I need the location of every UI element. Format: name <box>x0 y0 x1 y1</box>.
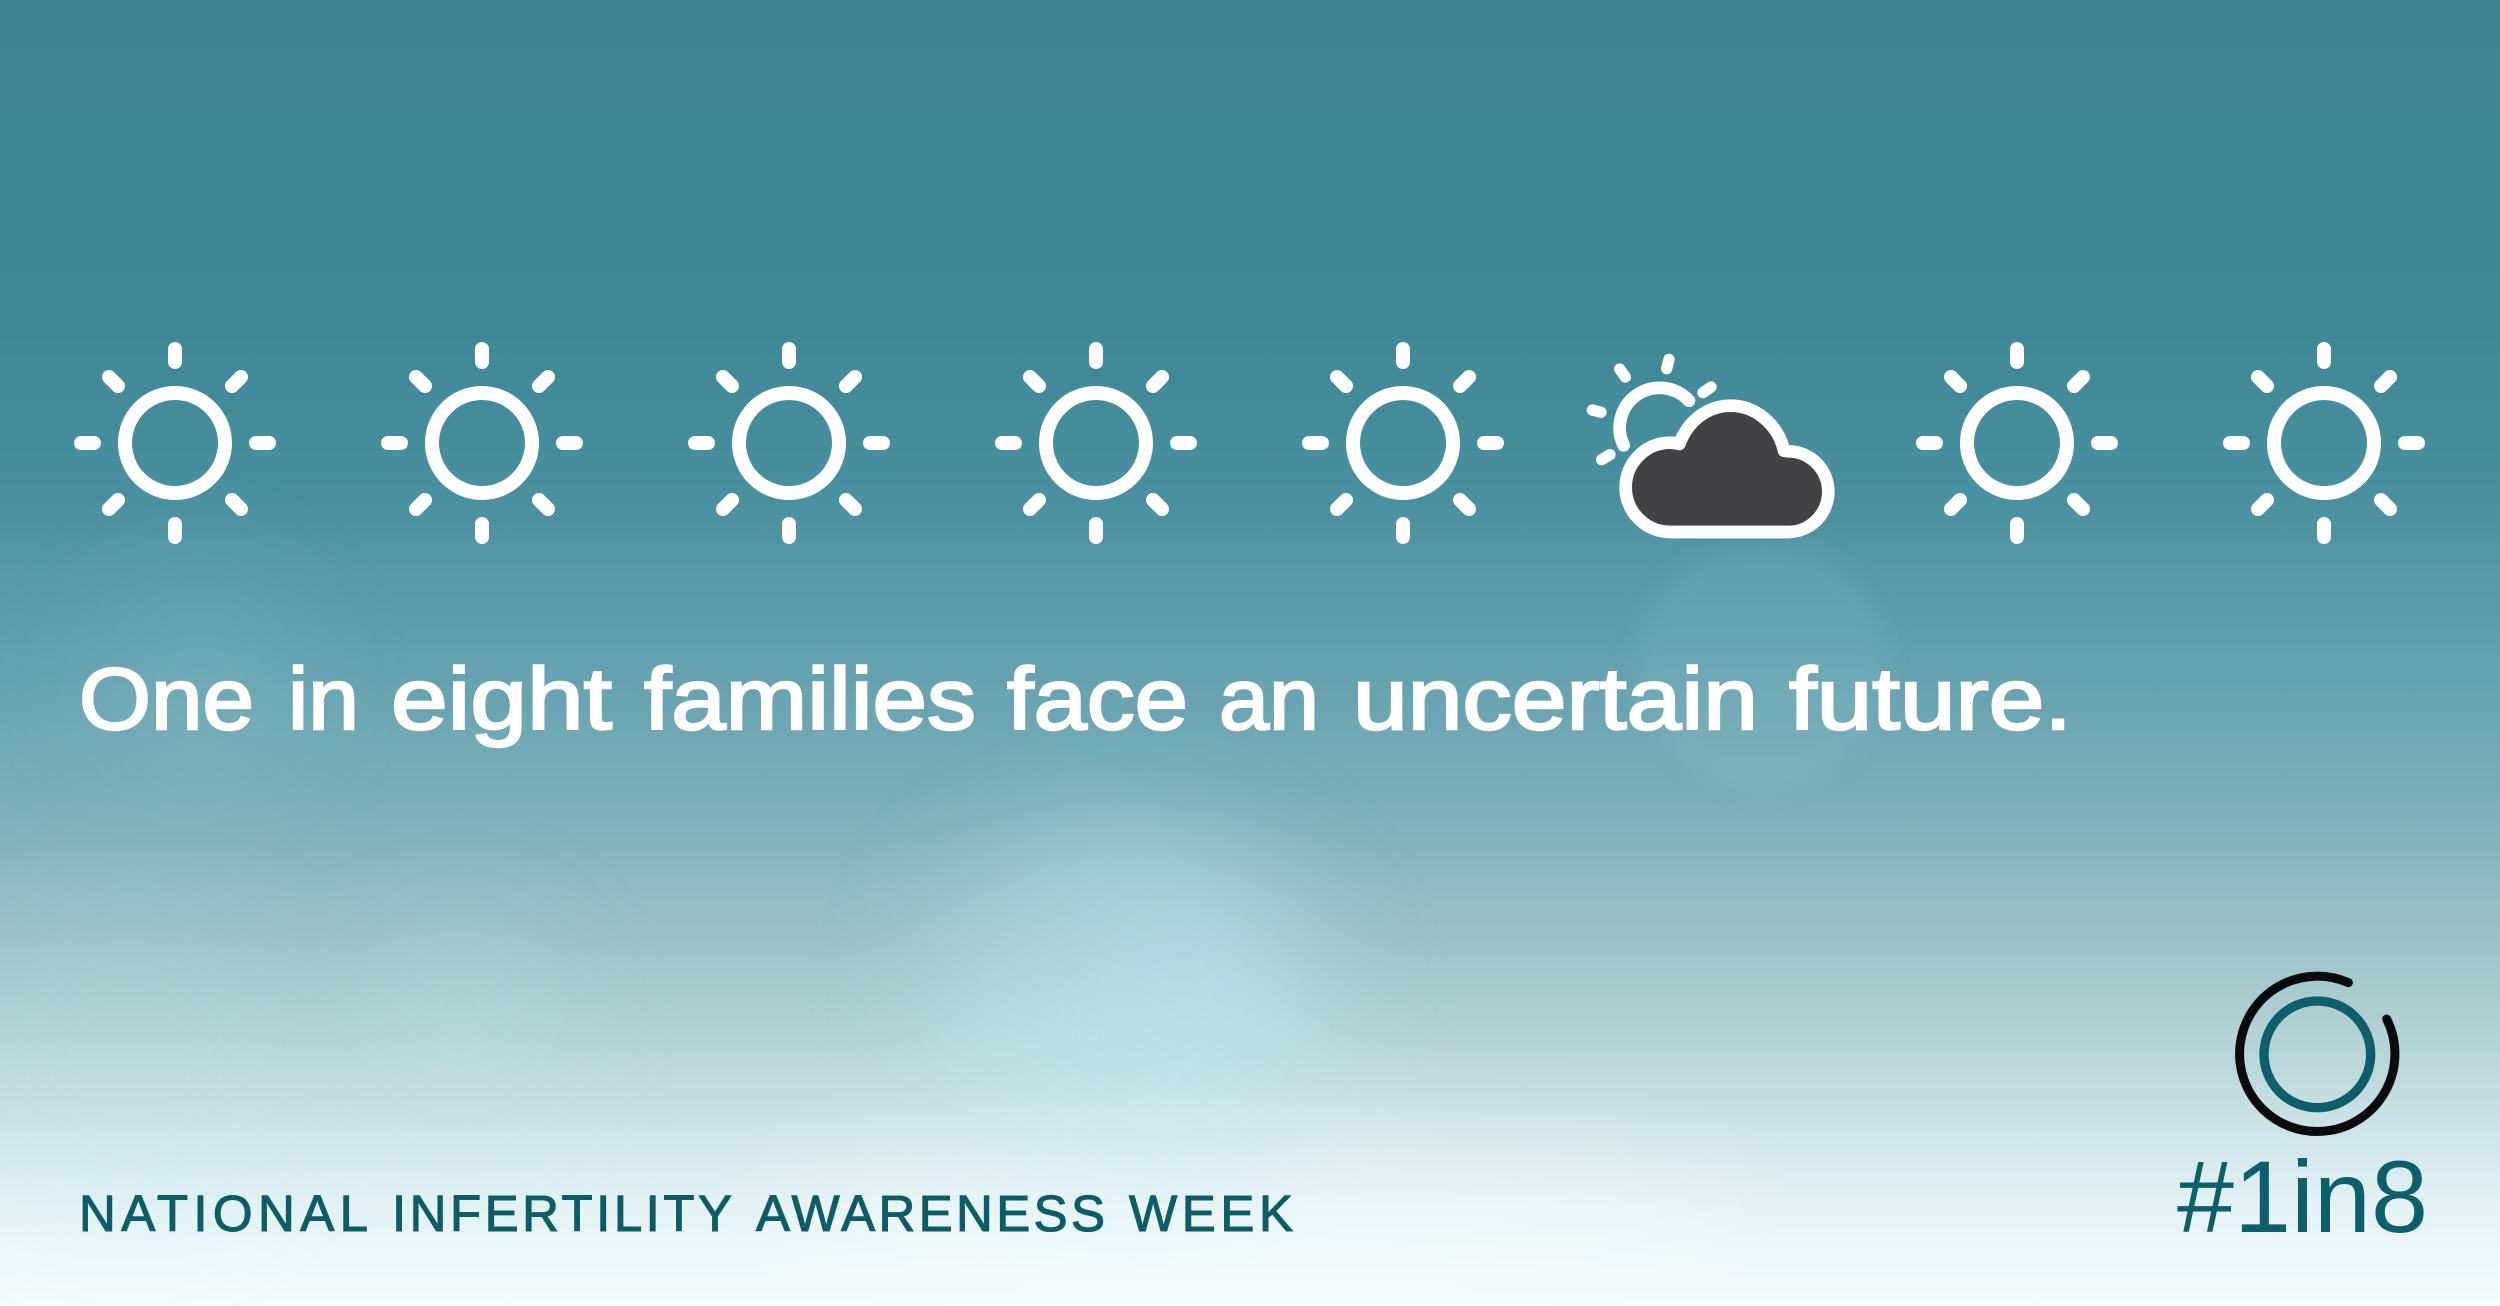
campaign label: INFERTILITY <box>392 1185 732 1242</box>
campaign label: WEEK <box>1129 1185 1293 1242</box>
headline <box>79 651 2072 748</box>
campaign label: NATIONAL <box>79 1185 368 1242</box>
headline: in <box>288 651 359 748</box>
campaign label: AWARENESS <box>756 1185 1105 1242</box>
icon: sun 2 <box>388 349 576 537</box>
icon: sun 1 <box>81 349 269 537</box>
headline: families <box>644 651 976 748</box>
headline: future. <box>1789 651 2072 748</box>
logo: concentric rings <box>2240 976 2395 1132</box>
icon: sun 3 <box>695 349 883 537</box>
icon: sun behind dark cloud <box>1592 359 1828 532</box>
headline: face <box>1007 651 1188 748</box>
campaign label <box>79 1185 1293 1242</box>
headline: One <box>79 651 254 748</box>
icon: sun 5 <box>1309 349 1497 537</box>
headline: an <box>1219 651 1319 748</box>
icon: sun 4 <box>1002 349 1190 537</box>
headline: eight <box>391 651 612 748</box>
hashtag: #1in8 <box>2177 1140 2428 1254</box>
icon: sun 8 <box>2230 349 2418 537</box>
icon: sun 7 <box>1923 349 2111 537</box>
headline: uncertain <box>1353 651 1758 748</box>
